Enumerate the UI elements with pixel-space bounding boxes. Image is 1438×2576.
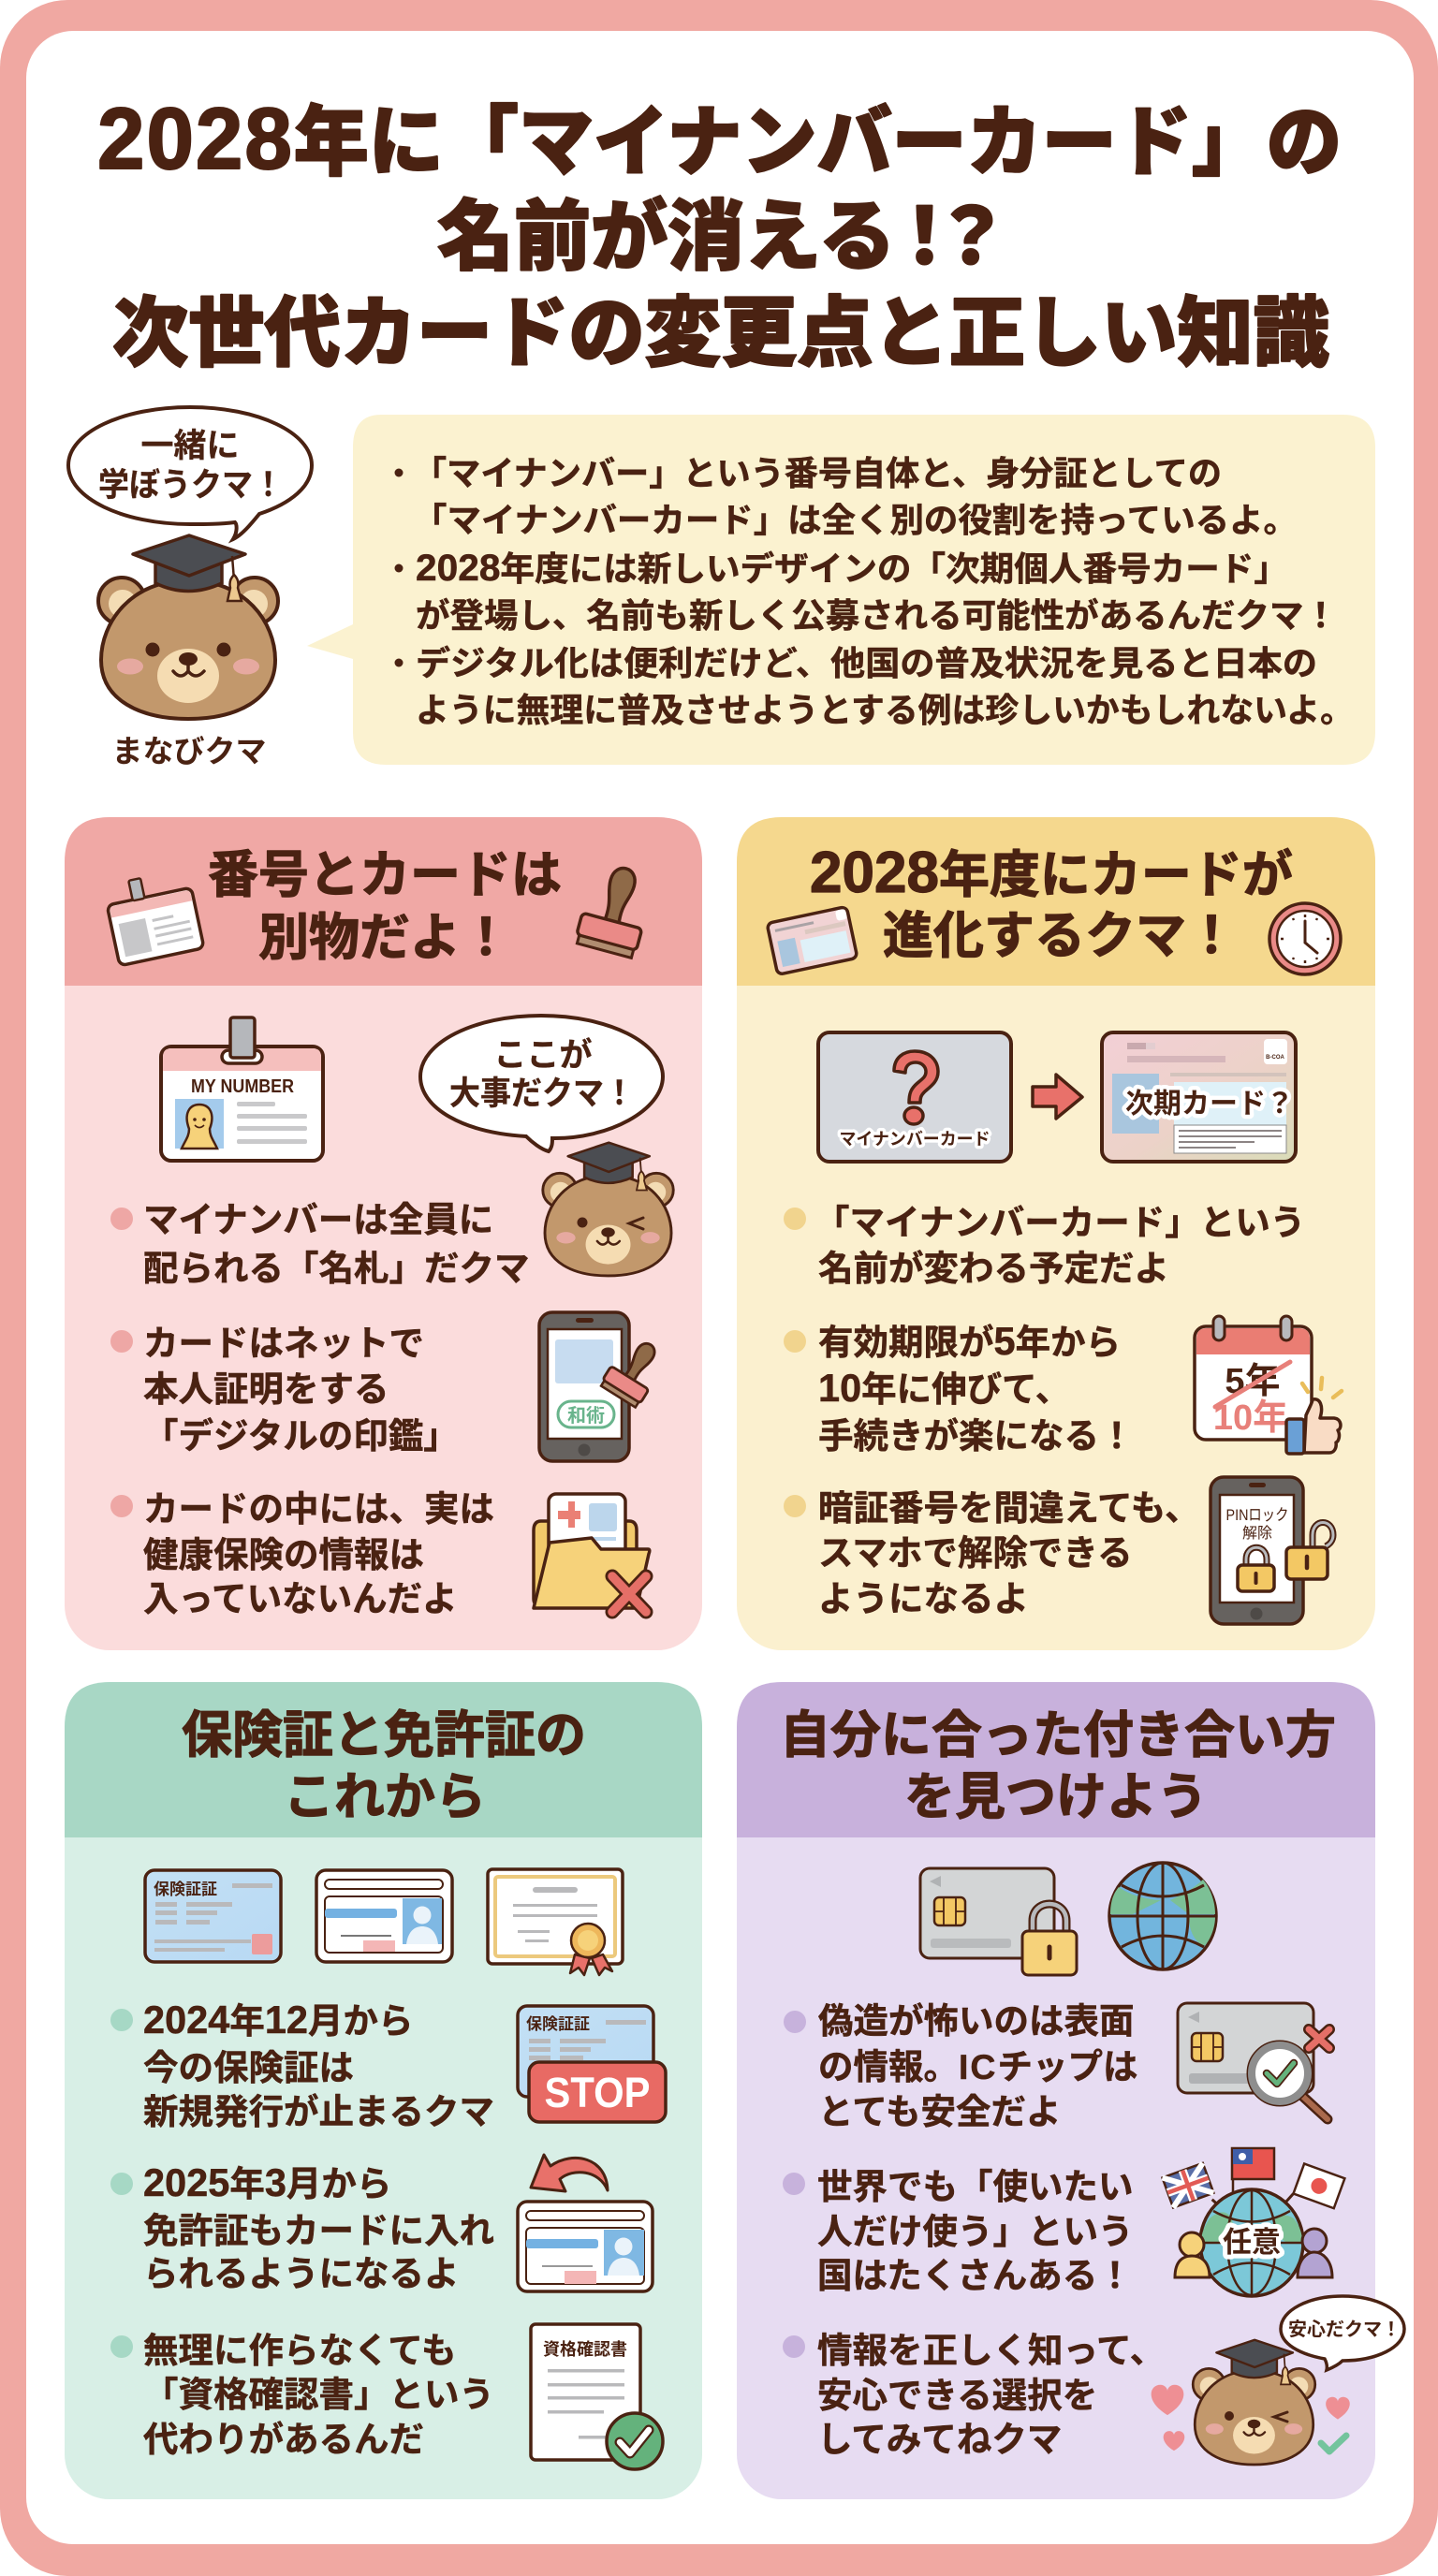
icon: IC card inspected [1178, 2003, 1329, 2119]
bullet 1 [110, 1200, 530, 1288]
bullet 3: 入っていないんだよ [143, 1579, 458, 1618]
bullet 2: 手続きが楽になる！ [818, 1416, 1135, 1456]
bullet 2: 「デジタルの印鑑」 [143, 1416, 459, 1456]
icon: IC card with lock [920, 1868, 1077, 1975]
icon: small card [767, 906, 858, 974]
globe [1200, 2189, 1303, 2296]
title: 次世代カードの変更点と正しい知識 [112, 291, 1329, 376]
icon: driver license [316, 1870, 452, 1962]
bullet 1: 新規発行が止まるクマ [143, 2092, 494, 2131]
bullet 2: 2025年3月から [143, 2160, 391, 2204]
icon: certificate document with check [531, 2324, 663, 2469]
intro text: デジタル化は便利だけど、他国の普及状況を見ると日本の [416, 644, 1317, 682]
heading: 保険証と免許証の [182, 1707, 586, 1764]
icon: calendar with thumbs up: 10年 [1213, 1398, 1288, 1438]
flag: Japan [1280, 2161, 1344, 2226]
bullet 3 [110, 1489, 494, 1618]
bullet 1: 配られる「名札」だクマ [143, 1249, 530, 1288]
icon: name badge [103, 869, 204, 966]
bullet 3: スマホで解除できる [818, 1533, 1133, 1573]
heading: 別物だよ！ [258, 910, 511, 966]
icon: driver license 2 [518, 2202, 653, 2291]
panel: 2028年度にカードが進化 [737, 817, 1375, 1650]
title [97, 90, 1342, 376]
icon: global flags with 任意 [1163, 2148, 1344, 2296]
heading: 2028年度にカードが [810, 841, 1293, 905]
speech bubble: 一緒に学ぼうクマ [68, 407, 312, 539]
bullet 1: マイナンバーは全員に [143, 1200, 493, 1239]
intro text: が登場し、名前も新しく公募される可能性があるんだクマ！ [416, 596, 1338, 635]
icon: folder with cross [534, 1494, 650, 1612]
icon: current card with question mark [818, 1032, 1011, 1162]
bullet 3 [110, 2331, 494, 2459]
icon: curved arrow [531, 2155, 608, 2191]
bullet 2 [110, 2160, 494, 2293]
icon: global flags with 任意: 任意 [1223, 2226, 1281, 2259]
icon: current card with question mark: マイナンバーカード [839, 1130, 990, 1149]
icon: next generation card [1102, 1032, 1296, 1162]
icon: calendar with thumbs up [1195, 1316, 1342, 1454]
bullet 2: カードはネットで [143, 1324, 424, 1363]
bullet 2: 免許証もカードに入れ [143, 2211, 494, 2250]
bear character [98, 535, 278, 719]
flag: Taiwan [1232, 2148, 1274, 2220]
icon: insurance card: 保険証証 [154, 1881, 217, 1898]
bullet 2: 本人証明をする [143, 1369, 389, 1409]
panel: 保険証と免許証のこれから [65, 1682, 702, 2499]
intro text: 「マイナンバー」という番号自体と、身分証としての [413, 454, 1222, 492]
bullet 2: 世界でも「使いたい [817, 2167, 1133, 2206]
bullet 2 [783, 2167, 1133, 2295]
icon: next generation card: B-COA [1266, 1055, 1284, 1061]
panel: 自分に合った付き合い方 [737, 1682, 1404, 2499]
bullet 1: 今の保険証は [143, 2048, 354, 2087]
intro text [395, 454, 1354, 729]
mascot name: まなびクマ [112, 734, 266, 768]
heading [780, 1707, 1336, 1825]
bear with hearts [1152, 2340, 1350, 2465]
icon: insurance card with STOP: 保険証証 [526, 2015, 590, 2033]
flag: UK [1163, 2159, 1239, 2243]
bullet 3: 安心できる選択を [817, 2376, 1097, 2415]
bullet 1 [110, 1998, 494, 2131]
bullet 1: 名前が変わる予定だよ [818, 1249, 1169, 1288]
bear winking [543, 1143, 673, 1276]
bullet 1 [784, 1203, 1305, 1288]
icon: certificate document with check: 資格確認書 [543, 2339, 627, 2359]
callout: ここが大事だクマ [420, 1016, 663, 1151]
icon: phone with PIN locks: 解除 [1242, 1525, 1272, 1542]
icon: phone with PIN locks: PINロック [1226, 1506, 1288, 1524]
bullet 3: 情報を正しく知って、 [817, 2331, 1165, 2370]
bullet 3: 健康保険の情報は [143, 1535, 424, 1574]
callout: ここが大事だクマ: 大事だクマ！ [449, 1076, 635, 1112]
intro text: 2028年度には新しいデザインの「次期個人番号カード」 [416, 548, 1288, 589]
icon: MY NUMBER id card: MY NUMBER [191, 1076, 294, 1097]
bullet 3: ようになるよ [818, 1579, 1029, 1618]
intro speech panel [307, 415, 1375, 765]
icon: next generation card: 次期カード？ [1125, 1089, 1294, 1120]
icon: stamp [575, 860, 656, 959]
heading: を見つけよう [904, 1769, 1208, 1825]
bullet 2: 国はたくさんある！ [817, 2256, 1133, 2295]
icon: phone with PIN locks [1211, 1477, 1333, 1624]
bullet 3: カードの中には、実は [143, 1489, 494, 1529]
title: 名前が消える！？ [437, 195, 1010, 280]
speech bubble: 一緒に学ぼうクマ: 一緒に [140, 428, 240, 464]
intro text: ように無理に普及させようとする例は珍しいかもしれないよ。 [416, 691, 1354, 729]
callout: 安心だクマ [1281, 2296, 1404, 2370]
title: 2028年に「マイナンバーカード」の [97, 90, 1342, 187]
icon: insurance card with STOP: STOP [545, 2069, 650, 2116]
people [1175, 2229, 1332, 2277]
icon: clock [1269, 903, 1341, 974]
bullet 3 [784, 1488, 1200, 1618]
bullet 1: 2024年12月から [143, 1998, 414, 2042]
bullet 2: 人だけ使う」という [817, 2212, 1133, 2251]
callout: 安心だクマ: 安心だクマ！ [1288, 2319, 1401, 2340]
bullet 2: 10年に伸びて、 [818, 1366, 1070, 1410]
heading [810, 841, 1293, 964]
intro text: 「マイナンバーカード」は全く別の役割を持っているよ。 [413, 501, 1298, 539]
bullet 2: られるようになるよ [143, 2254, 459, 2293]
bullet 1: 偽造が怖いのは表面 [818, 2001, 1135, 2041]
icon: globe [1109, 1863, 1216, 1969]
panel: 番号とカードは別物 [65, 817, 702, 1650]
icon: certificate with rosette [488, 1869, 623, 1975]
bullet 3: してみてねクマ [817, 2420, 1062, 2459]
bullet 3: 暗証番号を間違えても、 [818, 1488, 1200, 1528]
icon: MY NUMBER id card [161, 1017, 323, 1161]
bullet 1: 「マイナンバーカード」という [814, 1203, 1305, 1242]
speech bubble: 一緒に学ぼうクマ: 学ぼうクマ！ [98, 467, 284, 504]
arrow [1033, 1075, 1082, 1119]
mascot: まなびクマ with speech bubble [68, 407, 312, 768]
bullet 3: 代わりがあるんだ [143, 2420, 424, 2459]
bullet 1: とても安全だよ [818, 2092, 1062, 2131]
icon: insurance card with STOP [518, 2006, 666, 2122]
heading: 進化するクマ！ [883, 908, 1237, 964]
icon: calendar with thumbs up: 5年 [1225, 1362, 1281, 1401]
bullet 1: の情報。ICチップは [818, 2047, 1138, 2086]
bullet 3: 無理に作らなくても [143, 2331, 457, 2370]
heading: 番号とカードは [208, 847, 562, 903]
bullet 1 [784, 2001, 1138, 2131]
bullet 2 [784, 1319, 1135, 1456]
icon: phone with stamp [539, 1312, 669, 1461]
icon: phone with stamp: 和術 [567, 1404, 605, 1427]
bullet 3: 「資格確認書」という [143, 2375, 494, 2414]
bullet 3 [783, 2331, 1165, 2459]
heading: 自分に合った付き合い方 [780, 1707, 1336, 1764]
heading: これから [284, 1769, 486, 1825]
heading [182, 1707, 586, 1825]
heading [208, 847, 562, 966]
icon: insurance card [145, 1870, 281, 1962]
callout: ここが大事だクマ: ここが [493, 1037, 593, 1074]
bullet 2: 有効期限が5年から [818, 1319, 1121, 1363]
bullet 2 [110, 1324, 459, 1456]
